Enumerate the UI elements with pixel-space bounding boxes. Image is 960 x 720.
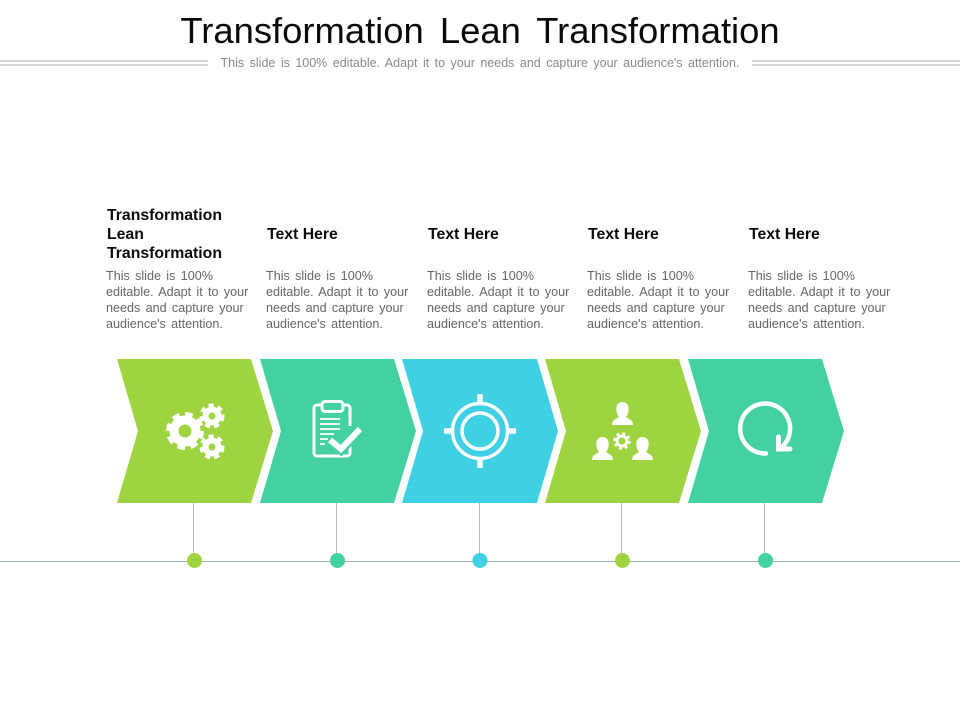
- text: column 5: audience's attention.: [748, 317, 865, 331]
- text: column 2: audience's attention.: [266, 317, 383, 331]
- timeline line: [0, 560, 960, 562]
- text: column 1: This slide is 100%: [106, 269, 213, 283]
- text: column 1: editable. Adapt it to your: [106, 285, 248, 299]
- text: column 5: This slide is 100%: [748, 269, 855, 283]
- heading: column 1: [107, 207, 222, 262]
- chevron 2: [260, 359, 416, 503]
- chevron 1: [117, 359, 273, 503]
- text: column 4: audience's attention.: [587, 317, 704, 331]
- text: column 5: [748, 269, 890, 331]
- subtitle: This slide is 100% editable. Adapt it to your needs and capture your audience's attention.: [221, 56, 739, 70]
- text: column 3: needs and capture your: [427, 301, 565, 315]
- heading: column 4: Text Here: [588, 226, 659, 243]
- text: column 3: This slide is 100%: [427, 269, 534, 283]
- dot 4: [615, 553, 630, 568]
- text: column 3: editable. Adapt it to your: [427, 285, 569, 299]
- icon: refresh arrow: [740, 404, 790, 454]
- chevron 3: [402, 359, 558, 503]
- icon: gears: [168, 406, 222, 458]
- text: column 1: audience's attention.: [106, 317, 223, 331]
- dot 1: [187, 553, 202, 568]
- text: column 2: [266, 269, 408, 331]
- chevron 5: [688, 359, 844, 503]
- dot 2: [330, 553, 345, 568]
- text: column 2: This slide is 100%: [266, 269, 373, 283]
- icon: target: [444, 394, 516, 468]
- heading: column 3: Text Here: [428, 226, 499, 243]
- text: column 4: This slide is 100%: [587, 269, 694, 283]
- stem 2: [336, 503, 338, 554]
- stem 3: [478, 503, 480, 554]
- text: column 1: [106, 269, 248, 331]
- dot 5: [758, 553, 773, 568]
- title: Transformation Lean Transformation: [180, 10, 780, 51]
- text: column 3: audience's attention.: [427, 317, 544, 331]
- stem 5: [764, 503, 766, 554]
- icon: team with gear: [592, 402, 653, 460]
- stem 4: [620, 503, 622, 554]
- heading: column 5: Text Here: [749, 226, 820, 243]
- text: column 2: needs and capture your: [266, 301, 404, 315]
- heading: column 1: Transformation: [107, 245, 222, 262]
- chevron 4: [545, 359, 701, 503]
- stem 1: [192, 503, 194, 554]
- header rule: right: [752, 60, 960, 66]
- dot 3: [472, 553, 488, 568]
- text: column 5: editable. Adapt it to your: [748, 285, 890, 299]
- text: column 4: [587, 269, 730, 331]
- header rule: left: [0, 60, 208, 66]
- text: column 2: editable. Adapt it to your: [266, 285, 408, 299]
- heading: column 1: Transformation: [107, 207, 222, 224]
- heading: column 2: Text Here: [267, 226, 338, 243]
- text: column 4: needs and capture your: [587, 301, 725, 315]
- text: column 5: needs and capture your: [748, 301, 886, 315]
- text: column 3: [427, 269, 570, 331]
- text: column 4: editable. Adapt it to your: [587, 285, 729, 299]
- text: column 1: needs and capture your: [106, 301, 244, 315]
- icon: clipboard with check: [314, 402, 360, 456]
- heading: column 1: Lean: [107, 226, 144, 243]
